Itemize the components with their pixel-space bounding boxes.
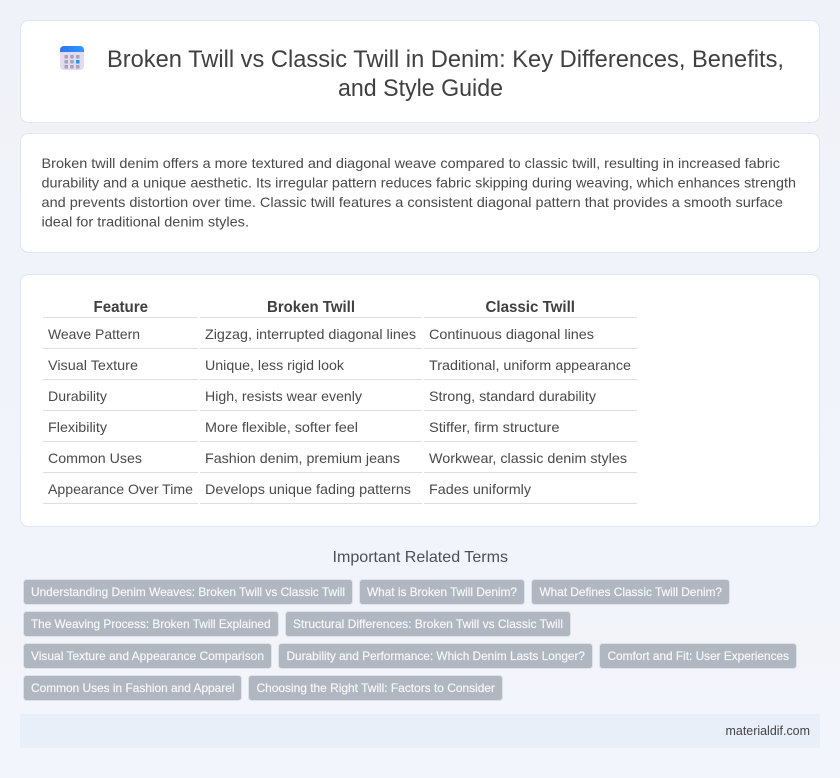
text block: summary paragraph: Broken twill denim offers a more textured and diagonal weave compared to classic twill, resulting in increased fabric — [42, 155, 780, 171]
table row: flexibility: More flexible, softer feel — [205, 419, 358, 435]
table header row: Classic Twill — [486, 299, 575, 316]
heading: related terms: Important Related Terms — [332, 549, 508, 566]
table row: visual texture: Visual Texture — [48, 357, 138, 373]
table row: weave pattern: Weave Pattern — [48, 326, 140, 342]
tag — [278, 644, 592, 668]
tag — [248, 676, 502, 700]
footer — [20, 714, 820, 748]
text block: summary paragraph: ideal for traditional denim styles. — [42, 214, 249, 230]
panel: header — [20, 20, 820, 122]
panel: comparison table — [20, 274, 820, 526]
table row: weave pattern: Zigzag, interrupted diagonal lines — [205, 326, 416, 342]
table row: weave pattern — [43, 326, 637, 349]
table row: appearance over time — [43, 481, 637, 504]
tag — [600, 644, 796, 668]
table row: appearance over time: Appearance Over Time — [48, 481, 193, 497]
text block: summary paragraph — [42, 155, 796, 230]
table row: durability — [43, 388, 637, 411]
footer source text: materialdif.com — [726, 724, 810, 738]
tag — [532, 580, 730, 604]
tag: What is Broken Twill Denim? — [367, 585, 517, 599]
table row: visual texture: Unique, less rigid look — [205, 357, 345, 373]
tag — [24, 676, 242, 700]
title — [107, 46, 784, 102]
table row: appearance over time: Develops unique fading patterns — [205, 481, 411, 497]
table row: flexibility — [43, 419, 637, 442]
table row: flexibility: Stiffer, firm structure — [429, 419, 560, 435]
table header row — [43, 299, 637, 318]
tag: Common Uses in Fashion and Apparel — [31, 681, 234, 695]
text block: summary paragraph: and prevents distortion over time. Classic twill features a consistent diagonal pattern that provides a smooth surface — [42, 194, 783, 210]
table row: common uses — [43, 450, 637, 473]
tag: Visual Texture and Appearance Comparison — [31, 649, 264, 663]
tag — [24, 612, 278, 636]
tag: Durability and Performance: Which Denim Lasts Longer? — [286, 649, 585, 663]
tag: What Defines Classic Twill Denim? — [540, 585, 722, 599]
text block: summary paragraph: durability and a unique aesthetic. Its irregular pattern reduces fabric skipping during weaving, which enhances strength — [42, 174, 796, 190]
tag — [360, 580, 524, 604]
table row: common uses: Workwear, classic denim styles — [429, 450, 627, 466]
table header row: Feature — [94, 299, 148, 316]
table row: durability: High, resists wear evenly — [205, 388, 362, 404]
table row: common uses: Common Uses — [48, 450, 142, 466]
tag — [286, 612, 570, 636]
table row: flexibility: Flexibility — [48, 419, 107, 435]
title: and Style Guide — [338, 75, 503, 102]
tag: The Weaving Process: Broken Twill Explained — [31, 617, 270, 631]
tag: Comfort and Fit: User Experiences — [608, 649, 789, 663]
tag: Understanding Denim Weaves: Broken Twill vs Classic Twill — [31, 585, 345, 599]
tag list: related terms — [24, 580, 796, 700]
tag: Structural Differences: Broken Twill vs Classic Twill — [293, 617, 563, 631]
table row: durability: Durability — [48, 388, 107, 404]
title: Broken Twill vs Classic Twill in Denim: Key Differences, Benefits, — [107, 46, 784, 73]
table row: visual texture: Traditional, uniform appearance — [429, 357, 631, 373]
table row: visual texture — [43, 357, 637, 380]
tag — [24, 644, 272, 668]
tag: Choosing the Right Twill: Factors to Consider — [256, 681, 495, 695]
icon: calendar — [60, 46, 84, 70]
table header row: Broken Twill — [267, 299, 355, 316]
table row: durability: Strong, standard durability — [429, 388, 596, 404]
table row: appearance over time: Fades uniformly — [429, 481, 531, 497]
panel: introduction — [20, 134, 820, 252]
tag — [24, 580, 352, 604]
table row: common uses: Fashion denim, premium jeans — [205, 450, 400, 466]
table row: weave pattern: Continuous diagonal lines — [429, 326, 594, 342]
